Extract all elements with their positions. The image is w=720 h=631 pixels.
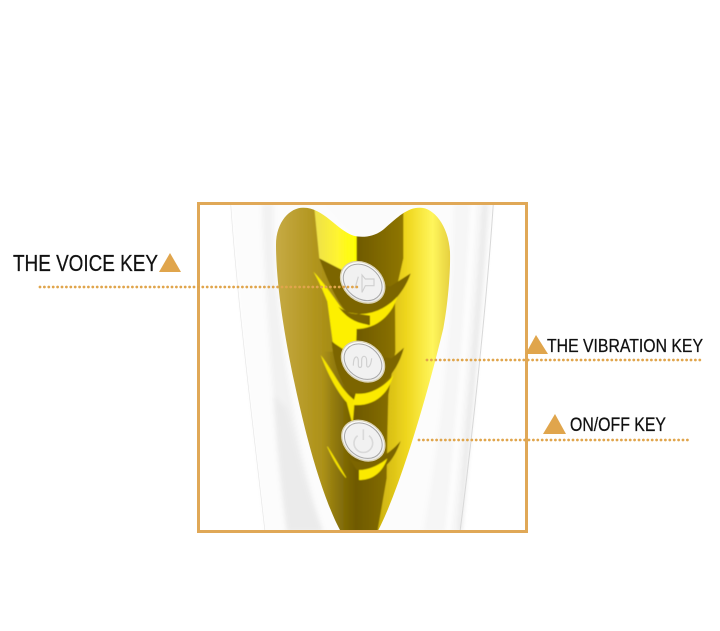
icon: speaker bbox=[355, 275, 374, 292]
button: vibration bbox=[332, 332, 394, 391]
icon: triangle voice bbox=[159, 253, 181, 272]
button: power bbox=[333, 411, 394, 470]
upper chevron dark bbox=[319, 258, 411, 319]
leader: voice key bbox=[40, 286, 361, 288]
glass body bbox=[231, 195, 494, 538]
lower chevron dark bbox=[353, 441, 401, 470]
icon: wave bbox=[353, 356, 372, 367]
bright yellow band bbox=[314, 210, 358, 270]
icon: triangle vibration bbox=[526, 335, 548, 354]
leader: vibration key bbox=[427, 359, 702, 361]
label: on/off key: ON/OFF KEY bbox=[570, 414, 666, 436]
button: voice bbox=[331, 252, 394, 313]
label: vibration key: THE VIBRATION KEY bbox=[547, 336, 703, 356]
frame bbox=[198, 204, 526, 532]
icon: power bbox=[354, 429, 373, 452]
icon: triangle on/off bbox=[543, 414, 566, 434]
upper yellow zone bbox=[313, 272, 370, 352]
middle chevron dark bbox=[332, 342, 404, 395]
gold panel bbox=[273, 205, 453, 532]
lower chevron yellow bbox=[327, 447, 346, 478]
middle chevron yellow bbox=[321, 355, 355, 425]
label: voice key: THE VOICE KEY bbox=[13, 250, 158, 276]
leader: on/off key bbox=[419, 439, 691, 441]
device illustration bbox=[231, 195, 494, 538]
